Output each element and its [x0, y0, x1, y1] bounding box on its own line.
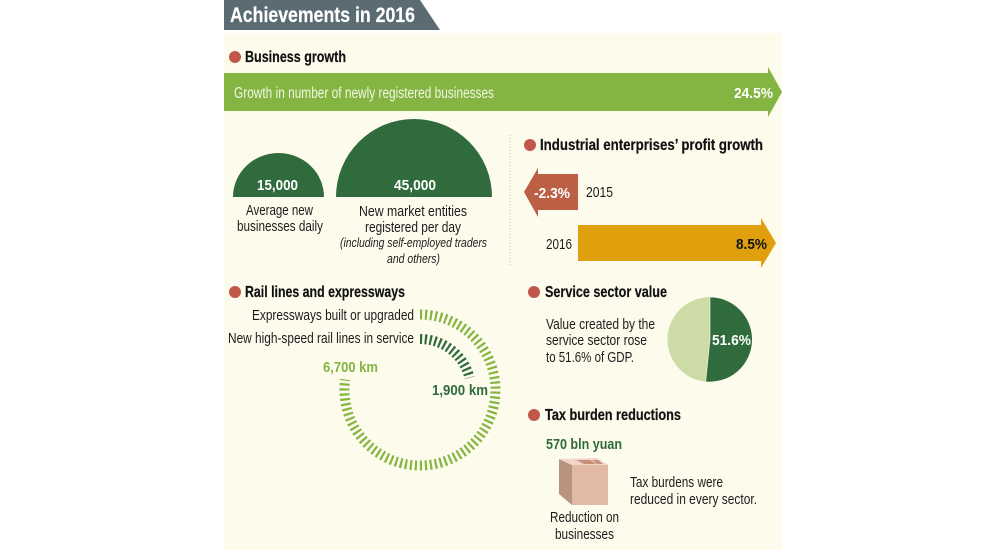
description: service sector: [546, 317, 655, 366]
description: service sector: Value created by the: [546, 317, 655, 333]
pie chart: 51.6%: [668, 297, 752, 382]
arrow: 2016 8.5%: 2016: [546, 237, 572, 253]
description: tax burdens: reduced in every sector.: [630, 492, 757, 508]
panel: service sector value: [528, 284, 752, 382]
semicircle: 15,000 average new businesses: 15,000: [257, 178, 298, 194]
icon: stack of money box: [559, 458, 608, 505]
heading: tax burden: Tax burden reductions: [545, 407, 681, 424]
description: tax burdens: Tax burdens were: [630, 475, 723, 491]
radial chart: high-speed rail 1,900 km: New high-speed rail lines in service: [228, 331, 414, 347]
caption: reduction on businesses: Reduction on: [550, 510, 619, 526]
description: service sector: to 51.6% of GDP.: [546, 350, 634, 366]
caption: reduction on businesses: businesses: [555, 527, 614, 543]
value: 570 bln yuan: 570 bln yuan: [546, 437, 622, 453]
semicircle: 15,000 average new businesses: [233, 153, 324, 235]
title banner: Achievements in 2016: [230, 4, 415, 27]
semicircle: 45,000 new market entities: [336, 119, 492, 266]
arrow: 2016 8.5%: [546, 218, 776, 268]
semicircle: 15,000 average new businesses: businesses daily: [237, 219, 324, 235]
heading: rail lines: Rail lines and expressways: [245, 284, 405, 301]
arrow: 2015 -2.3%: [524, 168, 613, 217]
arrow: 2016 8.5%: 8.5%: [736, 237, 767, 253]
heading: service sector: Service sector value: [545, 284, 667, 301]
radial chart: expressways 6,700 km: Expressways built or upgraded: [252, 308, 414, 324]
radial chart: high-speed rail 1,900 km: [228, 331, 488, 399]
heading: industrial profit growth: Industrial enterprises’ profit growth: [540, 137, 763, 154]
radial chart: high-speed rail 1,900 km: 1,900 km: [432, 383, 488, 399]
panel: rail lines and expressways: [228, 284, 495, 466]
panel: industrial profit growth: [524, 137, 776, 268]
semicircle: 45,000 new market entities: 45,000: [394, 178, 436, 194]
semicircle: 15,000 average new businesses: Average new: [246, 203, 313, 219]
semicircle: 45,000 new market entities: registered per day: [365, 220, 462, 236]
description: service sector: service sector rose: [546, 333, 647, 349]
radial chart: expressways 6,700 km: [252, 308, 495, 466]
description: tax burdens: [630, 475, 757, 508]
semicircle: 45,000 new market entities: and others): [387, 251, 440, 266]
radial chart: expressways 6,700 km: 6,700 km: [323, 360, 378, 376]
semicircle: 45,000 new market entities: (including self-employed traders: [340, 235, 487, 250]
arrow: growth in newly registered businesses: 24.5%: [734, 85, 773, 102]
arrow: 2015 -2.3%: 2015: [586, 185, 613, 201]
arrow: growth in newly registered businesses: [224, 67, 782, 117]
panel: business growth: [224, 49, 782, 266]
panel: tax burden reductions: [528, 407, 757, 543]
background panel: [224, 33, 782, 550]
caption: reduction on businesses: [550, 510, 619, 543]
arrow: 2015 -2.3%: -2.3%: [534, 186, 570, 202]
semicircle: 45,000 new market entities: New market entities: [359, 204, 467, 220]
heading: business growth: Business growth: [245, 49, 346, 66]
pie chart: 51.6%: 51.6%: [712, 333, 751, 349]
arrow: growth in newly registered businesses: Growth in number of newly registered businesses: [234, 85, 494, 102]
